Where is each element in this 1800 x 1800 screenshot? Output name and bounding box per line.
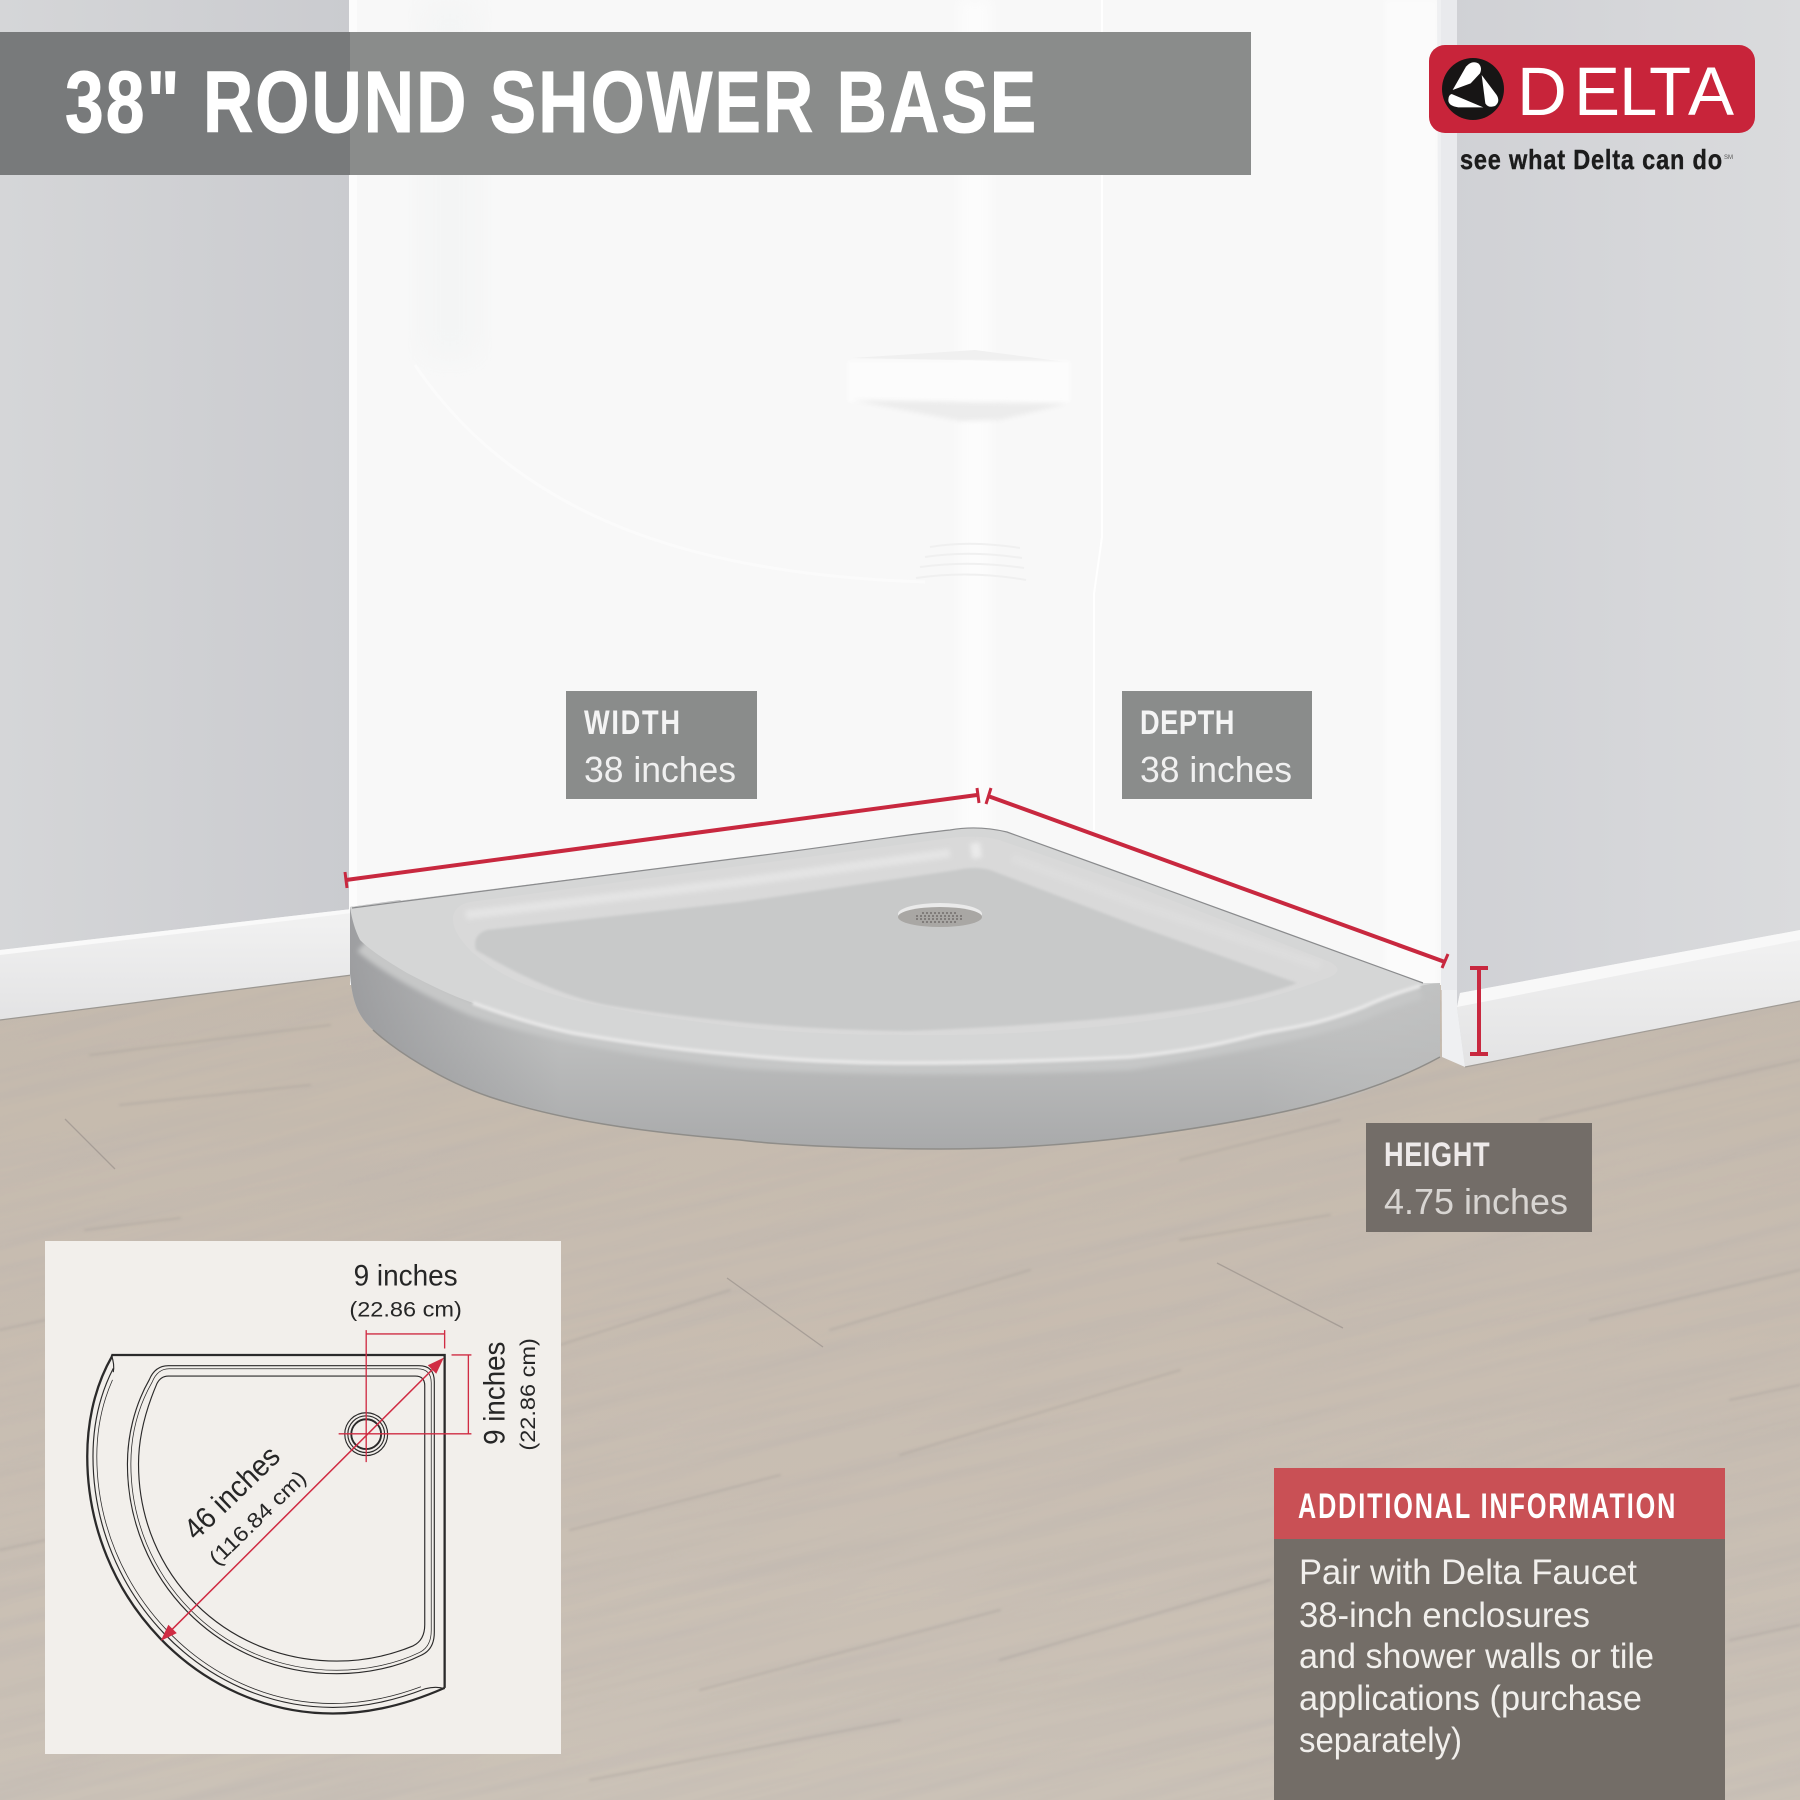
- additional information panel: [1274, 1468, 1725, 1800]
- panel body: [1274, 1539, 1725, 1800]
- 9 inches vertical label: [478, 1338, 540, 1451]
- title banner: [0, 32, 1251, 175]
- 46 inches diagonal label: 46 inches: [178, 1440, 287, 1546]
- depth dimension line: [986, 788, 1448, 968]
- height label: [1366, 1123, 1592, 1232]
- drain outline: [345, 1413, 388, 1456]
- 46 inches diagonal label: [178, 1440, 311, 1570]
- 9 inches horizontal label: [349, 1260, 462, 1321]
- header text: ADDITIONAL INFORMATION: [1298, 1487, 1675, 1526]
- left baseboard: [0, 909, 352, 1020]
- width dimension line: [345, 788, 979, 888]
- 9 inches horizontal label: 9 inches: [354, 1260, 458, 1293]
- depth label: [1122, 691, 1312, 799]
- body text: 38-inch enclosures: [1299, 1596, 1590, 1635]
- body text: Pair with Delta Faucet: [1299, 1553, 1637, 1592]
- title text: 38" ROUND SHOWER BASE: [65, 54, 1036, 151]
- 9 inches vertical label: 9 inches: [478, 1342, 511, 1445]
- right wall: [1450, 0, 1800, 1080]
- depth label: 38 inches: [1140, 749, 1292, 790]
- corner trim strip: [1437, 0, 1465, 1067]
- base outer side face: [350, 828, 1440, 1149]
- basin floor: [475, 868, 1297, 1031]
- corner soap shelf: [848, 350, 1070, 421]
- soft shoulder between rim and side: [362, 946, 1420, 1067]
- dimension lines: [345, 788, 1488, 1054]
- panel header: [1274, 1468, 1725, 1539]
- rim highlight: [473, 986, 1420, 1063]
- wood floor: [0, 975, 1800, 1800]
- logo red badge: [1429, 45, 1755, 133]
- drain: [898, 903, 982, 927]
- base outline drawing: [87, 1355, 445, 1714]
- inset plan diagram panel: [45, 1241, 561, 1754]
- width label: WIDTH: [584, 703, 680, 742]
- height label: HEIGHT: [1384, 1135, 1490, 1174]
- red dimension lines: [161, 1330, 471, 1641]
- Delta logo: [1429, 45, 1755, 175]
- width label: 38 inches: [584, 749, 736, 790]
- 9 inches vertical label: (22.86 cm): [517, 1338, 540, 1451]
- left wall: [0, 0, 352, 1040]
- right baseboard: [1457, 930, 1800, 1067]
- 9 inches horizontal label: (22.86 cm): [349, 1298, 462, 1321]
- logo wordmark: DELTA: [1517, 53, 1734, 130]
- wall ribs: [916, 544, 1026, 580]
- height label: 4.75 inches: [1384, 1181, 1568, 1222]
- body text: separately): [1299, 1721, 1462, 1760]
- back edge shadow: [352, 828, 1423, 983]
- rim top surface: [350, 828, 1440, 1063]
- white shower wall panel: [349, 0, 1442, 1000]
- service mark: SM: [1724, 155, 1733, 161]
- width label: [566, 691, 757, 799]
- inset background: [45, 1241, 561, 1754]
- basin recess slope: [453, 837, 1338, 1035]
- body text: [1299, 1553, 1654, 1760]
- logo emblem: [1442, 58, 1504, 120]
- depth label: DEPTH: [1140, 703, 1234, 742]
- height dimension line: [1470, 968, 1488, 1054]
- body text: and shower walls or tile: [1299, 1637, 1654, 1676]
- shower base product: [350, 828, 1440, 1149]
- tagline: see what Delta can do: [1460, 145, 1722, 175]
- slope highlights: [466, 843, 1320, 966]
- body text: applications (purchase: [1299, 1679, 1642, 1718]
- 46 inches diagonal label: (116.84 cm): [205, 1466, 311, 1570]
